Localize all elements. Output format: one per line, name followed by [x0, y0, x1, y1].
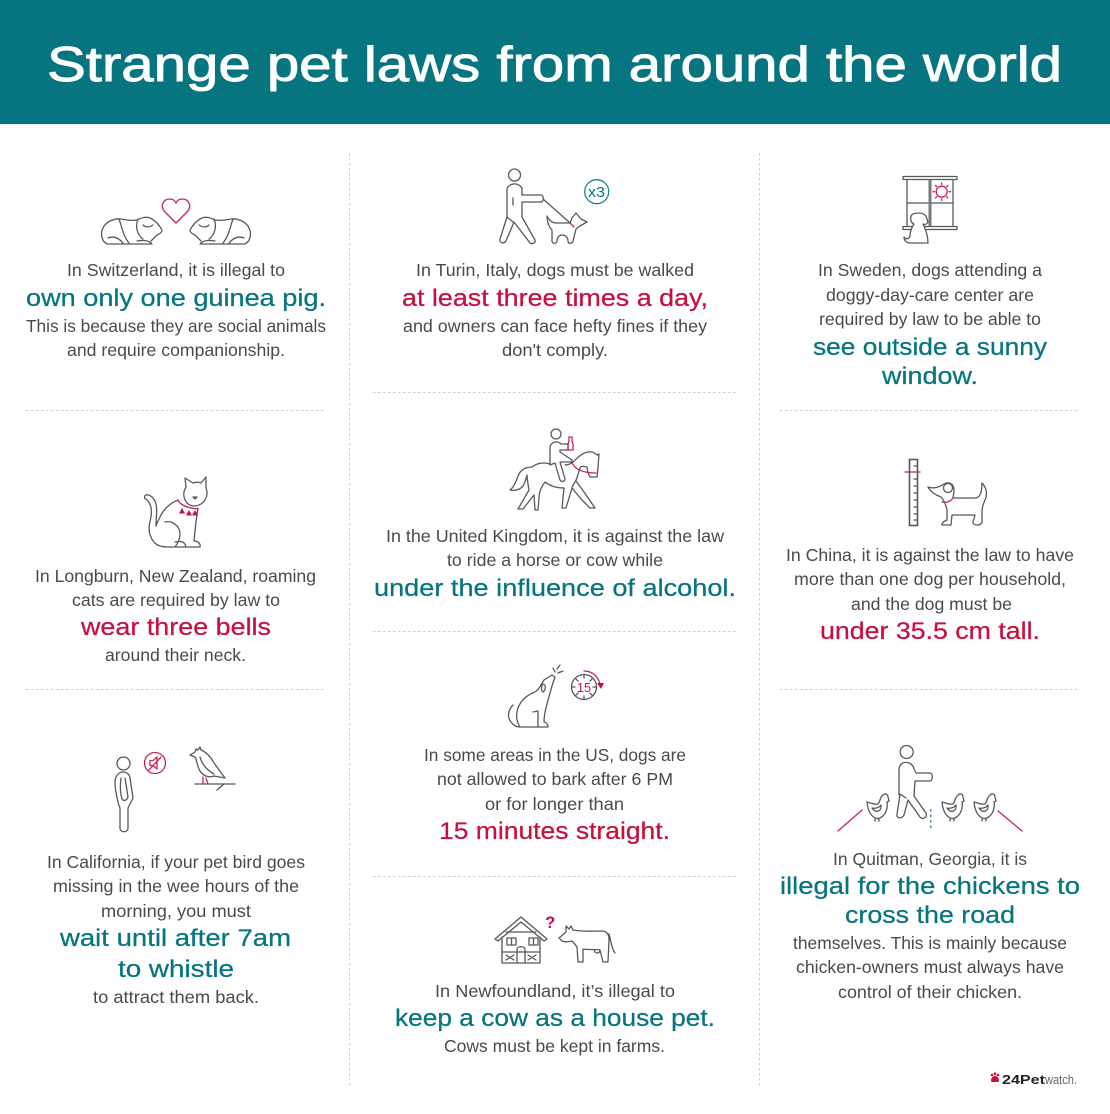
text: Switzerland: and require companionship.	[67, 340, 285, 360]
text: Turin	[402, 260, 708, 360]
icon: rider on horse with bottle	[510, 429, 599, 510]
icon: howling dog and clock: 15	[577, 680, 591, 695]
text: California: to whistle	[118, 956, 234, 983]
text: Quitman: control of their chicken.	[838, 982, 1022, 1002]
text: Quitman: chicken-owners must always have	[796, 957, 1064, 977]
text: US: or for longer than	[485, 794, 624, 814]
text: California	[47, 852, 305, 1007]
text: California: wait until after 7am	[59, 925, 291, 952]
text: Sweden: see outside a sunny	[813, 334, 1048, 361]
icon: dog and height ruler	[905, 460, 986, 526]
text: Longburn: around their neck.	[105, 645, 246, 665]
text: Quitman: themselves. This is mainly because	[793, 933, 1067, 953]
logo: 24Petwatch: 24Pet	[1002, 1072, 1046, 1087]
icon: person, chickens and road	[838, 746, 1022, 831]
text: Switzerland: This is because they are social animals	[26, 316, 326, 336]
panel: Newfoundland cow	[395, 913, 715, 1056]
text: Turin: don't comply.	[502, 340, 608, 360]
text: Newfoundland: keep a cow as a house pet.	[395, 1005, 715, 1032]
text: US: not allowed to bark after 6 PM	[437, 769, 673, 789]
text: Switzerland	[26, 260, 326, 360]
text: United Kingdom	[374, 526, 736, 602]
logo: 24Petwatch: watch.	[1044, 1072, 1077, 1087]
icon: person walking dog	[500, 169, 609, 244]
text: Switzerland: In Switzerland, it is illegal to	[67, 260, 285, 280]
text: Sweden: doggy-day-care center are	[826, 285, 1034, 305]
panel: Quitman chickens	[780, 746, 1080, 1002]
panel: Sweden window	[813, 176, 1048, 390]
text: Newfoundland	[395, 981, 715, 1056]
text: China: In China, it is against the law to have	[786, 545, 1074, 565]
panel: Longburn cat	[35, 477, 316, 665]
text: Longburn: In Longburn, New Zealand, roaming	[35, 566, 316, 586]
icon: howling dog and clock	[509, 665, 604, 727]
text: China	[786, 545, 1074, 645]
text: Longburn: wear three bells	[80, 614, 271, 641]
text: Newfoundland: Cows must be kept in farms.	[444, 1036, 665, 1056]
text: California: morning, you must	[101, 901, 251, 921]
icon: house and cow	[495, 913, 615, 963]
logo: 24Petwatch	[991, 1072, 1077, 1087]
text: Quitman: In Quitman, Georgia, it is	[833, 849, 1027, 869]
text: Longburn: cats are required by law to	[72, 590, 280, 610]
text: Sweden: In Sweden, dogs attending a	[818, 260, 1042, 280]
text: United Kingdom: to ride a horse or cow while	[447, 550, 663, 570]
icon: dog at sunny window	[903, 176, 957, 243]
text: Turin: and owners can face hefty fines if they	[403, 316, 707, 336]
text: China: and the dog must be	[851, 594, 1012, 614]
icon: house and cow: ?	[545, 913, 555, 932]
title: Strange pet laws from around the world	[47, 38, 1062, 92]
text: Longburn	[35, 566, 316, 665]
text: Sweden: window.	[881, 363, 978, 390]
text: US: In some areas in the US, dogs are	[424, 745, 686, 765]
text: Sweden	[813, 260, 1048, 390]
text: China: under 35.5 cm tall.	[820, 618, 1040, 645]
panel: United Kingdom horse	[374, 429, 736, 602]
text: Turin: at least three times a day,	[402, 285, 708, 312]
icon: cat with bells	[144, 477, 207, 547]
header banner	[0, 0, 1110, 124]
text: Switzerland: own only one guinea pig.	[26, 285, 326, 312]
text: China: more than one dog per household,	[794, 569, 1066, 589]
text: Quitman: illegal for the chickens to	[780, 873, 1080, 900]
text: US	[424, 745, 686, 845]
text: Turin: In Turin, Italy, dogs must be walked	[416, 260, 694, 280]
text: United Kingdom: In the United Kingdom, it is against the law	[386, 526, 724, 546]
text: Quitman	[780, 849, 1080, 1002]
panel: California bird	[47, 747, 305, 1007]
text: United Kingdom: under the influence of alcohol.	[374, 575, 736, 602]
text: Quitman: cross the road	[845, 902, 1015, 929]
text: California: missing in the wee hours of the	[53, 876, 299, 896]
icon: person and bird	[115, 747, 235, 832]
panel: Switzerland guinea pigs	[26, 199, 326, 360]
text: Newfoundland: In Newfoundland, it’s illegal to	[435, 981, 675, 1001]
text: Sweden: required by law to be able to	[819, 309, 1041, 329]
text: US: 15 minutes straight.	[439, 818, 670, 845]
text: California: In California, if your pet bird goes	[47, 852, 305, 872]
icon: guinea pigs and heart	[102, 199, 250, 244]
text: California: to attract them back.	[93, 987, 259, 1007]
panel: US barking	[424, 665, 686, 845]
icon: person walking dog: x3	[588, 184, 605, 201]
panel: Turin dog walking	[402, 169, 708, 360]
panel: China dog	[786, 460, 1074, 645]
